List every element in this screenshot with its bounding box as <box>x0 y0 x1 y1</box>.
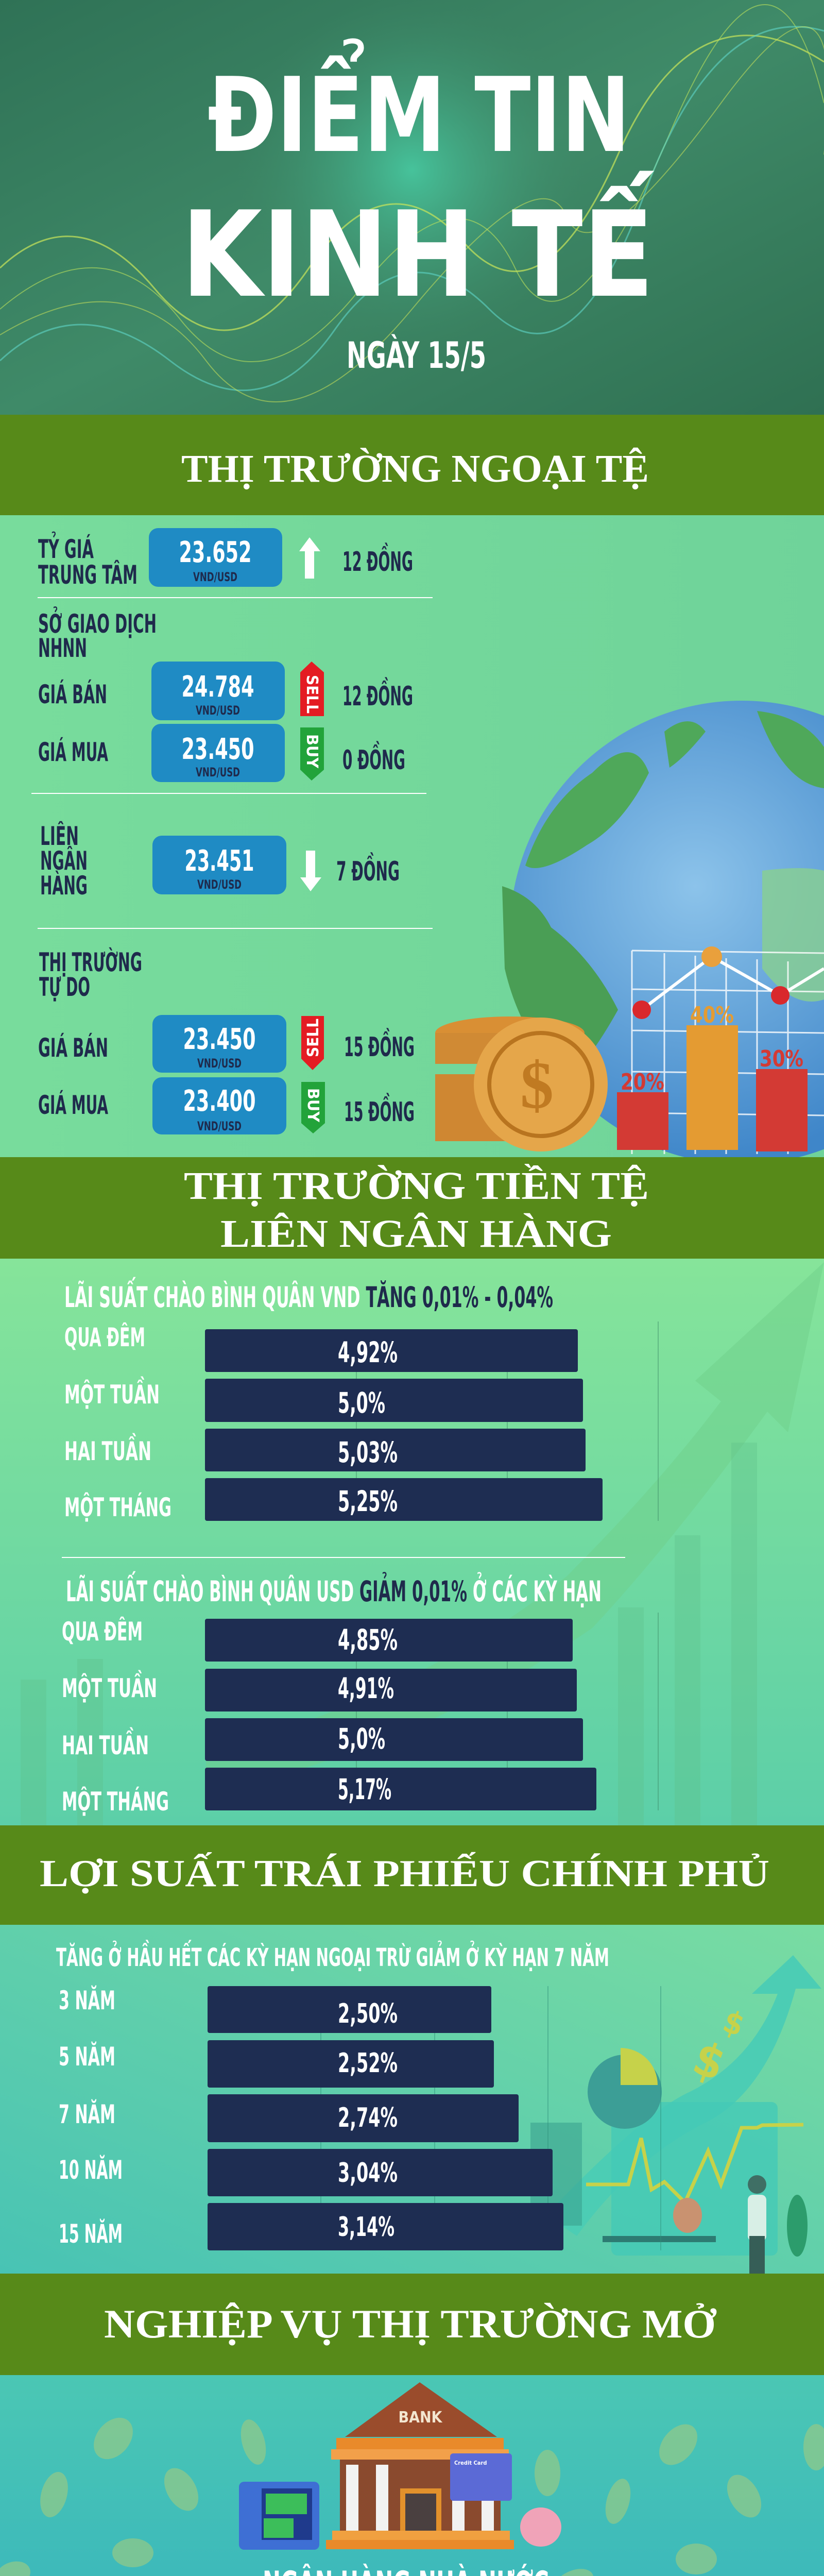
bar chart: bond yields: 3 NĂM <box>59 1985 115 2015</box>
row: sở giao dịch NHNN: GIÁ MUA <box>38 737 108 767</box>
row: tỷ giá trung tâm: TRUNG TÂM <box>38 560 138 590</box>
row: sở giao dịch NHNN: SELL <box>303 675 321 714</box>
illustration: growth arrow, pie, people <box>530 1955 821 2274</box>
bar chart: VND rates <box>64 1322 603 1522</box>
bar chart: bond yields: 2,52% <box>338 2048 398 2079</box>
row: thị trường tự do: BUY <box>304 1088 322 1122</box>
row: thị trường tự do: 15 ĐỒNG <box>344 1093 415 1128</box>
row: liên ngân hàng <box>40 821 400 901</box>
row: thị trường tự do: 23.450 <box>183 1023 255 1056</box>
row: sở giao dịch NHNN: GIÁ BÁN <box>38 679 107 709</box>
bar chart: bond yields: 3,04% <box>338 2158 398 2189</box>
row: liên ngân hàng: 7 ĐỒNG <box>336 852 400 887</box>
bar chart: bond yields <box>59 1985 563 2250</box>
band: lợi suất trái phiếu chính phủ <box>0 1825 824 1925</box>
header: title background <box>0 0 824 415</box>
panel: open market operations <box>0 2375 824 2576</box>
row: tỷ giá trung tâm: 23.652 <box>179 536 251 569</box>
bar chart: bond yields: 7 NĂM <box>59 2099 115 2129</box>
illustration: globe with coins and chart: $ <box>520 1048 554 1123</box>
row: thị trường tự do: SELL <box>304 1019 322 1057</box>
row: thị trường tự do: THỊ TRƯỜNG <box>39 947 142 977</box>
panel: interbank rates <box>0 1259 824 1825</box>
illustration: globe with coins and chart: 20% <box>621 1069 664 1095</box>
panel: bond yields <box>0 1925 824 2274</box>
band: nghiệp vụ thị trường mở: NGHIỆP VỤ THỊ TRƯỜNG MỞ <box>104 2301 716 2346</box>
bar chart: USD rates: MỘT TUẦN <box>62 1670 157 1703</box>
date: NGÀY 15/5 <box>347 334 486 377</box>
title: ĐIỂM TIN <box>208 38 630 176</box>
row: thị trường tự do: GIÁ MUA <box>38 1090 108 1120</box>
illustration: growth arrow, pie, people: $ <box>686 2031 732 2092</box>
title: KINH TẾ <box>181 171 655 324</box>
row: thị trường tự do: 15 ĐỒNG <box>344 1028 415 1063</box>
bar chart: VND rates: HAI TUẦN <box>64 1433 151 1466</box>
row: thị trường tự do <box>38 947 415 1134</box>
bar chart: bond yields: 5 NĂM <box>59 2041 115 2072</box>
row: sở giao dịch NHNN: 24.784 <box>181 670 254 704</box>
row: thị trường tự do: GIÁ BÁN <box>38 1032 108 1063</box>
bar chart: bond yields: 2,50% <box>338 1998 398 2029</box>
row: thị trường tự do: VND/USD <box>197 1056 242 1071</box>
row: liên ngân hàng: LIÊN <box>40 821 79 851</box>
row: thị trường tự do: 23.400 <box>183 1084 255 1118</box>
bar chart: VND rates: MỘT THÁNG <box>64 1492 171 1522</box>
row: thị trường tự do: VND/USD <box>197 1119 242 1133</box>
bar chart: USD rates <box>62 1616 596 1817</box>
bar chart: bond yields: 15 NĂM <box>59 2218 123 2249</box>
row: sở giao dịch NHNN: 12 ĐỒNG <box>342 677 413 712</box>
subtitle: VND: LÃI SUẤT CHÀO BÌNH QUÂN VND TĂNG 0,01% - 0,04% <box>64 1277 553 1314</box>
row: liên ngân hàng: VND/USD <box>197 877 242 892</box>
illustration: globe with coins and chart: 40% <box>690 1002 734 1028</box>
bar chart: USD rates: MỘT THÁNG <box>62 1786 169 1817</box>
row: sở giao dịch NHNN: VND/USD <box>196 765 240 779</box>
row: sở giao dịch NHNN: NHNN <box>38 633 87 663</box>
row: liên ngân hàng: HÀNG <box>40 870 88 901</box>
bar chart: USD rates: HAI TUẦN <box>62 1727 149 1760</box>
row: sở giao dịch NHNN: VND/USD <box>196 703 240 718</box>
band: nghiệp vụ thị trường mở <box>0 2274 824 2375</box>
bar chart: bond yields: 3,14% <box>338 2212 394 2243</box>
row: thị trường tự do: TỰ DO <box>39 972 90 1002</box>
row: sở giao dịch NHNN: 0 ĐỒNG <box>342 741 405 776</box>
row: liên ngân hàng: NGÂN <box>40 845 88 876</box>
bar chart: USD rates: 4,85% <box>338 1623 398 1656</box>
bar chart: USD rates: 5,17% <box>338 1773 391 1806</box>
bar chart: VND rates: MỘT TUẦN <box>64 1376 160 1410</box>
icon: bank building <box>239 2382 561 2550</box>
band: thị trường ngoại tệ <box>0 415 824 515</box>
icon: bank building: BANK <box>399 2409 443 2427</box>
illustration: growth arrow, pie, people: $ <box>718 2003 749 2044</box>
row: sở giao dịch NHNN: BUY <box>303 734 321 768</box>
subtitle: USD: LÃI SUẤT CHÀO BÌNH QUÂN USD GIẢM 0,01% Ở CÁC KỲ HẠN <box>66 1571 602 1608</box>
bar chart: USD rates: 5,0% <box>338 1722 385 1755</box>
row: tỷ giá trung tâm <box>38 528 413 590</box>
title <box>181 38 655 324</box>
bar chart: VND rates: 5,03% <box>338 1436 398 1469</box>
bar chart: USD rates: QUA ĐÊM <box>62 1616 143 1647</box>
bar chart: bond yields: 2,74% <box>338 2103 398 2133</box>
illustration: globe with coins and chart <box>435 701 824 1164</box>
bar chart: VND rates: 4,92% <box>338 1336 398 1369</box>
bar chart: VND rates: 5,25% <box>338 1485 398 1518</box>
bar chart: USD rates: 4,91% <box>338 1672 394 1705</box>
bar chart: VND rates: 5,0% <box>338 1386 385 1419</box>
panel: foreign exchange <box>0 515 824 1164</box>
icon: bank building: Credit Card <box>454 2460 487 2466</box>
row: tỷ giá trung tâm: TỶ GIÁ <box>38 531 94 564</box>
band: thị trường tiền tệ liên ngân hàng: THỊ TRƯỜNG TIỀN TỆ <box>184 1164 649 1208</box>
row: sở giao dịch NHNN: 23.450 <box>181 733 254 766</box>
row: tỷ giá trung tâm: 12 ĐỒNG <box>342 543 413 578</box>
row: liên ngân hàng: 23.451 <box>184 844 254 878</box>
band: thị trường tiền tệ liên ngân hàng <box>0 1157 824 1259</box>
row: sở giao dịch NHNN: SỞ GIAO DỊCH <box>38 606 157 639</box>
bar chart: VND rates: QUA ĐÊM <box>64 1322 145 1352</box>
row: tỷ giá trung tâm: VND/USD <box>193 570 237 584</box>
illustration: globe with coins and chart: 30% <box>760 1046 803 1072</box>
row: sở giao dịch NHNN <box>38 606 413 782</box>
band: thị trường tiền tệ liên ngân hàng: LIÊN NGÂN HÀNG <box>220 1212 612 1256</box>
bar chart: bond yields: 10 NĂM <box>59 2155 123 2185</box>
band: lợi suất trái phiếu chính phủ: LỢI SUẤT TRÁI PHIẾU CHÍNH PHỦ <box>40 1852 769 1895</box>
band: thị trường ngoại tệ: THỊ TRƯỜNG NGOẠI TỆ <box>181 447 649 490</box>
